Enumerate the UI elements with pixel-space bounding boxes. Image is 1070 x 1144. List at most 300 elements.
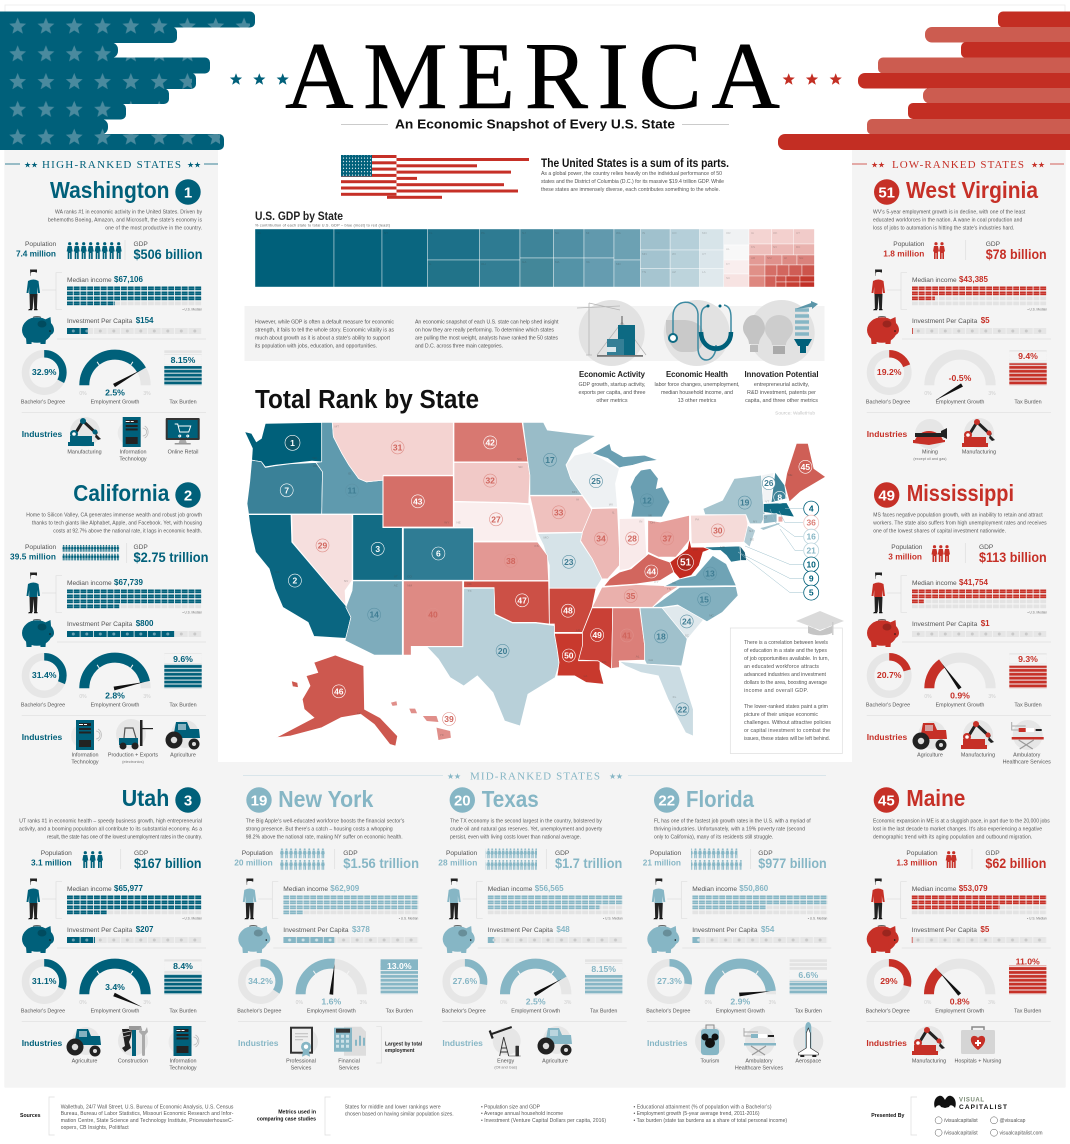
logo: Visual Capitalist: VISUAL: [959, 1098, 984, 1104]
bachelor donut: Bachelor's Degree: [21, 400, 65, 406]
description: MS faces negative population growth, with an inability to retain and attract: [873, 512, 1043, 518]
industries: Manufacturing: [962, 450, 996, 456]
flag graphic: [341, 155, 529, 199]
side rank badges: 9: [809, 574, 814, 584]
panel: why GDP falls short: strength, it fails to tell the whole story. Economic vitality is as: [255, 328, 394, 334]
map: ranks by state: DE: [750, 538, 754, 542]
industries: Manufacturing: [912, 1058, 946, 1064]
pig: [22, 620, 54, 647]
industries: Energy: [497, 1058, 515, 1064]
treemap state labels: IA: [751, 231, 754, 235]
industries: Services: [339, 1066, 360, 1072]
map: ranks by state: KS: [535, 544, 539, 548]
state name: New York: [278, 786, 374, 812]
treemap state labels: NY: [384, 231, 388, 235]
rank badge: 45: [878, 792, 895, 810]
tax burden: 13.0%: [387, 961, 412, 971]
map: ranks by state: ME: [788, 473, 793, 477]
investment per capita: Investment Per Capita: [912, 927, 977, 934]
side rank badges: 10: [806, 560, 816, 570]
map: ranks by state: AL: [636, 655, 640, 658]
tax burden: Tax Burden: [590, 1008, 617, 1014]
map rank numbers: 7: [284, 485, 289, 495]
median income: Median income: [488, 886, 533, 893]
rank badge: 19: [251, 792, 267, 810]
treemap state labels: NJ: [522, 231, 526, 235]
category: economic health: median household income, and: [661, 390, 733, 396]
person: [871, 878, 885, 919]
industries: Information: [170, 1058, 196, 1064]
map rank numbers: 34: [596, 534, 606, 544]
industries: Hospitals + Nursing: [955, 1058, 1001, 1064]
median income: $53,079: [959, 884, 988, 893]
description: one of the most productive in the country.: [105, 226, 202, 232]
tax burden: [790, 959, 827, 1014]
person: [26, 270, 40, 310]
map: ranks by state: [245, 422, 826, 746]
category: innovation potential: R&D investment, patents per: [747, 390, 816, 396]
map rank numbers: 24: [682, 616, 692, 626]
footer: sources: Bureau, Bureau of Labor Statistics, Missouri Economic Research and Infor-: [61, 1111, 234, 1117]
description: FL has one of the fastest job growth rates in the U.S. with a myriad of: [654, 818, 811, 824]
employment gauge: Employment Growth: [511, 1008, 560, 1014]
investment per capita: Investment Per Capita: [912, 318, 978, 325]
side rank badges: 4: [809, 504, 814, 514]
median income: Median income: [283, 886, 328, 893]
employment gauge: [500, 964, 572, 1014]
employment gauge: [924, 355, 996, 406]
pig: [867, 317, 899, 344]
category: innovation potential: capita, and three other metrics: [745, 398, 818, 404]
bachelor donut: [237, 963, 281, 1014]
description: activity, and a booming population all contribute to its substantial economy. As a: [19, 826, 202, 832]
employment gauge: 3%: [143, 1000, 151, 1006]
category: economic activity: Economic Activity: [579, 370, 646, 379]
map: ranks by state: IA: [576, 498, 579, 502]
employment gauge: 3%: [360, 1000, 367, 1006]
gdp: $167 billion: [134, 856, 202, 871]
investment per capita: $800: [136, 619, 154, 628]
bachelor donut: Bachelor's Degree: [21, 1008, 65, 1014]
map rank numbers: 18: [656, 631, 666, 641]
industries: (Oil and Gas): [494, 1066, 518, 1070]
description: Economic expansion in ME is at a sluggish pace, in part due to the 20,000 jobs: [873, 818, 1050, 824]
median income: [912, 884, 1047, 920]
map: ranks by state: IN: [639, 520, 642, 523]
investment per capita: [912, 316, 1047, 334]
population: [16, 241, 122, 259]
footer: presented by: [871, 1097, 917, 1135]
category: economic activity: other metrics: [596, 398, 628, 404]
treemap state labels: AR: [751, 256, 756, 260]
median income: [912, 275, 1047, 312]
description: crude oil and natural gas reserves. Yet, unemployment and poverty: [450, 826, 603, 832]
gdp: [134, 241, 202, 262]
map rank numbers: 14: [369, 610, 379, 620]
population: [896, 850, 957, 868]
panel: why GDP falls short: are pulling the most weight, analysts have ranked the 50 states: [415, 336, 558, 342]
median income: • U.S. Median: [182, 610, 202, 614]
gdp: $78 billion: [986, 247, 1047, 262]
investment per capita: [67, 619, 202, 637]
median income: $50,860: [739, 884, 769, 893]
employment gauge: 0%: [924, 1000, 932, 1006]
treemap state labels: UT: [796, 231, 800, 235]
employment gauge: -0.5%: [949, 373, 972, 383]
median income: Median income: [912, 277, 957, 284]
gdp: $2.75 trillion: [134, 550, 208, 565]
employment gauge: Employment Growth: [716, 1008, 765, 1014]
population: [31, 850, 103, 868]
bachelor donut: Bachelor's Degree: [442, 1008, 486, 1014]
category: economic health: Economic Health: [666, 370, 728, 379]
rank badge: 2: [184, 488, 192, 504]
footer: sources: [20, 1097, 234, 1135]
footer: metrics: • Employment growth (5-year average trend, 2011-2016): [634, 1111, 760, 1117]
gdp: $1.56 trillion: [343, 856, 419, 871]
icon: innovation potential: [743, 300, 818, 366]
callout: education: an educated workforce attracts: [744, 664, 819, 670]
social links: /visualcapitalist: [944, 1118, 978, 1124]
population: 3.1 million: [31, 858, 72, 868]
investment per capita: Investment Per Capita: [488, 927, 553, 934]
map: ranks by state: TN: [667, 587, 671, 591]
bachelor donut: 27.3%: [657, 976, 682, 986]
state name: Utah: [122, 785, 169, 811]
investment per capita: Investment Per Capita: [67, 927, 133, 934]
industries: Ambulatory: [745, 1058, 773, 1064]
side rank badges: [804, 501, 819, 600]
treemap state labels: IN: [642, 231, 645, 235]
employment gauge: 2.8%: [105, 690, 125, 700]
tax burden: 6.6%: [798, 970, 818, 980]
section heading: mid ranked: [243, 770, 826, 782]
section heading: low ranked: [852, 159, 1064, 171]
treemap state labels: DC: [796, 245, 801, 249]
side rank badges: 16: [806, 532, 816, 542]
treemap state labels: MO: [702, 231, 707, 235]
treemap state labels: CO: [672, 231, 677, 235]
industries: (except oil and gas): [913, 457, 947, 461]
panel: why GDP falls short: However, while GDP is often a default measure for economic: [255, 320, 394, 326]
callout: education: [730, 611, 844, 754]
tax burden: Tax Burden: [1014, 1008, 1041, 1014]
description: loss of jobs to automation is hitting the state's industries hard.: [873, 226, 1014, 232]
treemap state labels: KS: [751, 245, 755, 249]
gdp: GDP: [758, 850, 773, 857]
heading: U.S. GDP by State: U.S. GDP by State: [255, 209, 343, 223]
industries: [867, 720, 1051, 766]
panel: why GDP falls short: [244, 306, 824, 361]
map: ranks by state: WA: [312, 456, 317, 460]
map: ranks by state: IL: [612, 511, 615, 515]
map rank numbers: 43: [413, 496, 423, 506]
section heading: low ranked: ★★: [1031, 160, 1045, 170]
person: [872, 270, 885, 310]
employment gauge: 3%: [988, 1000, 996, 1006]
footer: metrics: • Average annual household income: [481, 1111, 563, 1117]
intro text: [541, 171, 724, 193]
state name: Maine: [906, 785, 965, 811]
category: economic activity: GDP growth, startup activity,: [578, 382, 646, 388]
map rank numbers: 38: [506, 556, 516, 566]
rank badge: [874, 482, 899, 508]
population: Population: [891, 544, 923, 551]
industries: Online Retail: [168, 450, 198, 456]
map rank numbers: 6: [436, 548, 441, 558]
employment gauge: [924, 658, 996, 708]
population: Population: [893, 241, 925, 248]
treemap state labels: IL: [429, 262, 432, 266]
treemap state labels: [257, 231, 803, 280]
tax burden: Tax Burden: [1014, 400, 1042, 406]
treemap state labels: HI: [784, 256, 787, 260]
bachelor donut: 31.4%: [32, 670, 57, 680]
footer: sources: oopers, CB Insights, Politifact: [61, 1125, 129, 1131]
map: ranks by state: SD: [518, 465, 523, 469]
employment gauge: 3%: [988, 391, 996, 397]
population: [643, 848, 742, 872]
map: ranks by state: AK: [357, 712, 361, 715]
industries: Manufacturing: [67, 450, 102, 456]
heading: total rank: Total Rank by State: [255, 386, 479, 414]
description: The TX economy is the second largest in the country, bolstered by: [450, 818, 602, 824]
industries: Largest by total: [385, 1042, 423, 1048]
footer: metrics: • Population size and GDP: [481, 1104, 541, 1110]
rank badge: [874, 179, 899, 205]
description: behemoths Boeing, Amazon, and Microsoft, the state's economy is: [48, 218, 202, 224]
population: Population: [25, 241, 56, 248]
employment gauge: Employment Growth: [91, 400, 139, 406]
description: strong presence. But there's a catch – housing costs a whopping: [246, 826, 393, 832]
map: ranks by state: CA: [275, 570, 279, 574]
investment per capita: [692, 925, 827, 943]
category: economic health: 13 other metrics: [678, 398, 717, 404]
population: Population: [446, 850, 477, 857]
section heading: high ranked: [5, 159, 218, 171]
callout: education: The lower-ranked states paint a grim: [744, 704, 828, 710]
investment per capita: $207: [136, 925, 154, 934]
bachelor donut: Bachelor's Degree: [866, 400, 910, 406]
median income: • U.S. Median: [1027, 916, 1047, 920]
tax burden: [1009, 350, 1047, 406]
rank badge: 22: [658, 792, 675, 810]
median income: [488, 884, 623, 920]
footer: metrics: • Investment (Venture Capital Dollars per capita, 2016): [481, 1118, 606, 1124]
section heading: high ranked: HIGH-RANKED STATES: [42, 159, 182, 171]
card: Washington: [16, 177, 206, 462]
social links: @visualcap: [1000, 1118, 1026, 1124]
treemap state labels: SC: [726, 276, 731, 280]
map rank numbers: 25: [591, 476, 601, 486]
rank badge: [450, 787, 475, 813]
title: AMERICA: [285, 23, 780, 129]
stars left of title: [230, 73, 289, 85]
map rank numbers: 32: [485, 476, 495, 486]
treemap state labels: NH: [799, 256, 803, 260]
population: Population: [242, 850, 273, 857]
map rank numbers: 27: [491, 514, 501, 524]
card: Utah: [19, 785, 206, 1072]
bachelor donut: 20.7%: [877, 670, 902, 680]
median income: Median income: [67, 886, 112, 893]
state name: Mississippi: [907, 480, 1014, 506]
callout: education: challenges. Without attractive policies: [744, 720, 831, 726]
map: ranks by state: WV: [693, 548, 698, 551]
social links: /visualcapitalist: [944, 1130, 978, 1136]
callout: education: There is a correlation between levels: [744, 640, 828, 646]
treemap state labels: MD: [616, 262, 621, 266]
bachelor donut: [646, 963, 690, 1014]
map rank numbers: 26: [764, 478, 774, 488]
tax burden: Tax Burden: [169, 1008, 197, 1014]
median income: [912, 578, 1047, 614]
investment per capita: $5: [980, 925, 990, 934]
employment gauge: 3%: [769, 1000, 776, 1006]
map: ranks by state: AR: [576, 629, 580, 633]
callout: education: advanced industries and investment: [744, 672, 827, 678]
map rank numbers: 2: [293, 576, 298, 586]
description: The Big Apple's well-educated workforce boosts the financial sector's: [246, 818, 405, 824]
bachelor donut: 31.1%: [32, 976, 57, 986]
investment per capita: Investment Per Capita: [283, 927, 349, 934]
callout: education: issues, these states will be left behind.: [744, 736, 830, 742]
median income: $67,739: [114, 578, 143, 587]
section heading: low ranked: ★★: [871, 160, 885, 170]
industries: Agriculture: [170, 752, 196, 758]
map: ranks by state: OR: [313, 464, 317, 468]
industries: Financial: [338, 1058, 360, 1064]
tax burden: 9.4%: [1018, 351, 1038, 361]
intro heading: The United States is a sum of its parts.: [541, 158, 729, 170]
description: UT ranks #1 in economic health – speedy business growth, high entrepreneurial: [19, 818, 202, 824]
treemap state labels: TX: [336, 231, 340, 235]
tax burden: 9.3%: [1018, 654, 1038, 664]
bachelor donut: Bachelor's Degree: [866, 1008, 910, 1014]
industries: Mining: [922, 450, 938, 456]
map rank numbers: 48: [563, 606, 573, 616]
median income: $65,977: [114, 884, 143, 893]
population: Population: [25, 544, 56, 551]
side rank badges: 36: [806, 518, 816, 528]
employment gauge: 2.5%: [526, 996, 546, 1006]
pig: [238, 926, 270, 953]
person: [652, 878, 665, 919]
gdp: GDP: [134, 850, 149, 857]
industries: Professional: [286, 1058, 316, 1064]
source note: Source: WalletHub: [775, 410, 815, 416]
bachelor donut: [866, 657, 910, 708]
bachelor donut: [21, 963, 65, 1014]
map rank numbers: 45: [801, 462, 810, 472]
employment gauge: [296, 963, 367, 1014]
tax burden: Tax Burden: [795, 1008, 822, 1014]
subtitle: An Economic Snapshot of Every U.S. State: [395, 118, 675, 132]
map rank numbers: 23: [564, 557, 574, 567]
map: ranks by state: NM: [407, 584, 413, 587]
tax burden: 8.15%: [171, 355, 196, 365]
description: [873, 210, 1026, 232]
industries: Aerospace: [795, 1058, 821, 1064]
card: Mississippi: [866, 480, 1051, 766]
state name: Florida: [686, 786, 755, 812]
map rank numbers: 15: [699, 594, 709, 604]
map rank numbers: 50: [564, 650, 574, 660]
gdp: $506 billion: [134, 247, 202, 262]
description: persist, even with living costs lower than national average.: [450, 834, 581, 840]
callout: education: or capital investment to combat the: [744, 728, 830, 734]
description: result, the state has one of the lowest unemployment rates in the country.: [47, 834, 202, 840]
employment gauge: 3%: [564, 1000, 572, 1006]
treemap state labels: NV: [773, 245, 777, 249]
employment gauge: 0%: [79, 694, 87, 700]
map: ranks by state: MD: [720, 545, 725, 549]
median income: $41,754: [959, 578, 988, 587]
map rank numbers: 42: [485, 437, 495, 447]
category: economic health: labor force changes, unemployment,: [654, 382, 740, 388]
investment per capita: $154: [136, 316, 154, 325]
industries: Manufacturing: [961, 752, 995, 758]
median income: Median income: [912, 886, 957, 893]
tax burden: [585, 959, 622, 1014]
heading: U.S. GDP by State: % contribution of each state to total U.S. GDP – blue (most) to red (least): [255, 224, 391, 228]
description: lost in the last decade to market changes. It's also experiencing a negative: [873, 826, 1042, 832]
employment gauge: Employment Growth: [936, 702, 984, 708]
industries: [22, 1026, 199, 1072]
map: ranks by state: WI: [609, 503, 613, 506]
median income: Median income: [67, 277, 112, 284]
treemap state labels: WA: [616, 231, 621, 235]
map: ranks by state: GA: [649, 658, 653, 662]
rank badge: [654, 787, 679, 813]
industries: Information: [72, 752, 98, 758]
industries: Industries: [442, 1038, 483, 1048]
banner: stars on blue: [0, 12, 255, 150]
bachelor donut: Bachelor's Degree: [21, 702, 65, 708]
icon: economic activity: [577, 300, 646, 366]
industries: Ambulatory: [1013, 752, 1041, 758]
rank badge: 1: [184, 184, 192, 202]
investment per capita: [67, 925, 202, 943]
pig: [867, 620, 899, 647]
callout: education: of education in a state and the types: [744, 648, 827, 654]
map rank numbers: 22: [678, 704, 687, 714]
panel: why GDP falls short: and D.C. across three main categories.: [415, 344, 503, 350]
map: ranks by state: ND: [517, 457, 522, 461]
bachelor donut: [866, 354, 910, 406]
state name: West Virginia: [906, 177, 1039, 203]
industries: Industries: [22, 1038, 62, 1048]
industries: Industries: [238, 1038, 279, 1048]
intro text: these states are immensely diverse, each contributes something to the whole.: [541, 187, 720, 193]
bachelor donut: Bachelor's Degree: [237, 1008, 281, 1014]
map rank numbers: 19: [740, 498, 750, 508]
tax burden: 11.0%: [1016, 956, 1040, 966]
industries: Technology: [169, 1066, 197, 1072]
treemap state labels: LA: [702, 270, 706, 274]
gdp: GDP: [979, 544, 994, 551]
population: 39.5 million: [10, 552, 56, 562]
median income: • U.S. Median: [182, 916, 202, 920]
side rank badges: 21: [806, 546, 816, 556]
panel: why GDP falls short: on how they are really performing. To determine which states: [415, 328, 554, 334]
investment per capita: $1: [981, 619, 990, 628]
logo: Visual Capitalist: [934, 1096, 1007, 1111]
rank badge: 51: [878, 184, 895, 202]
industries: (electronics): [122, 759, 145, 764]
card: Texas: [438, 786, 627, 1070]
bachelor donut: [866, 963, 910, 1014]
